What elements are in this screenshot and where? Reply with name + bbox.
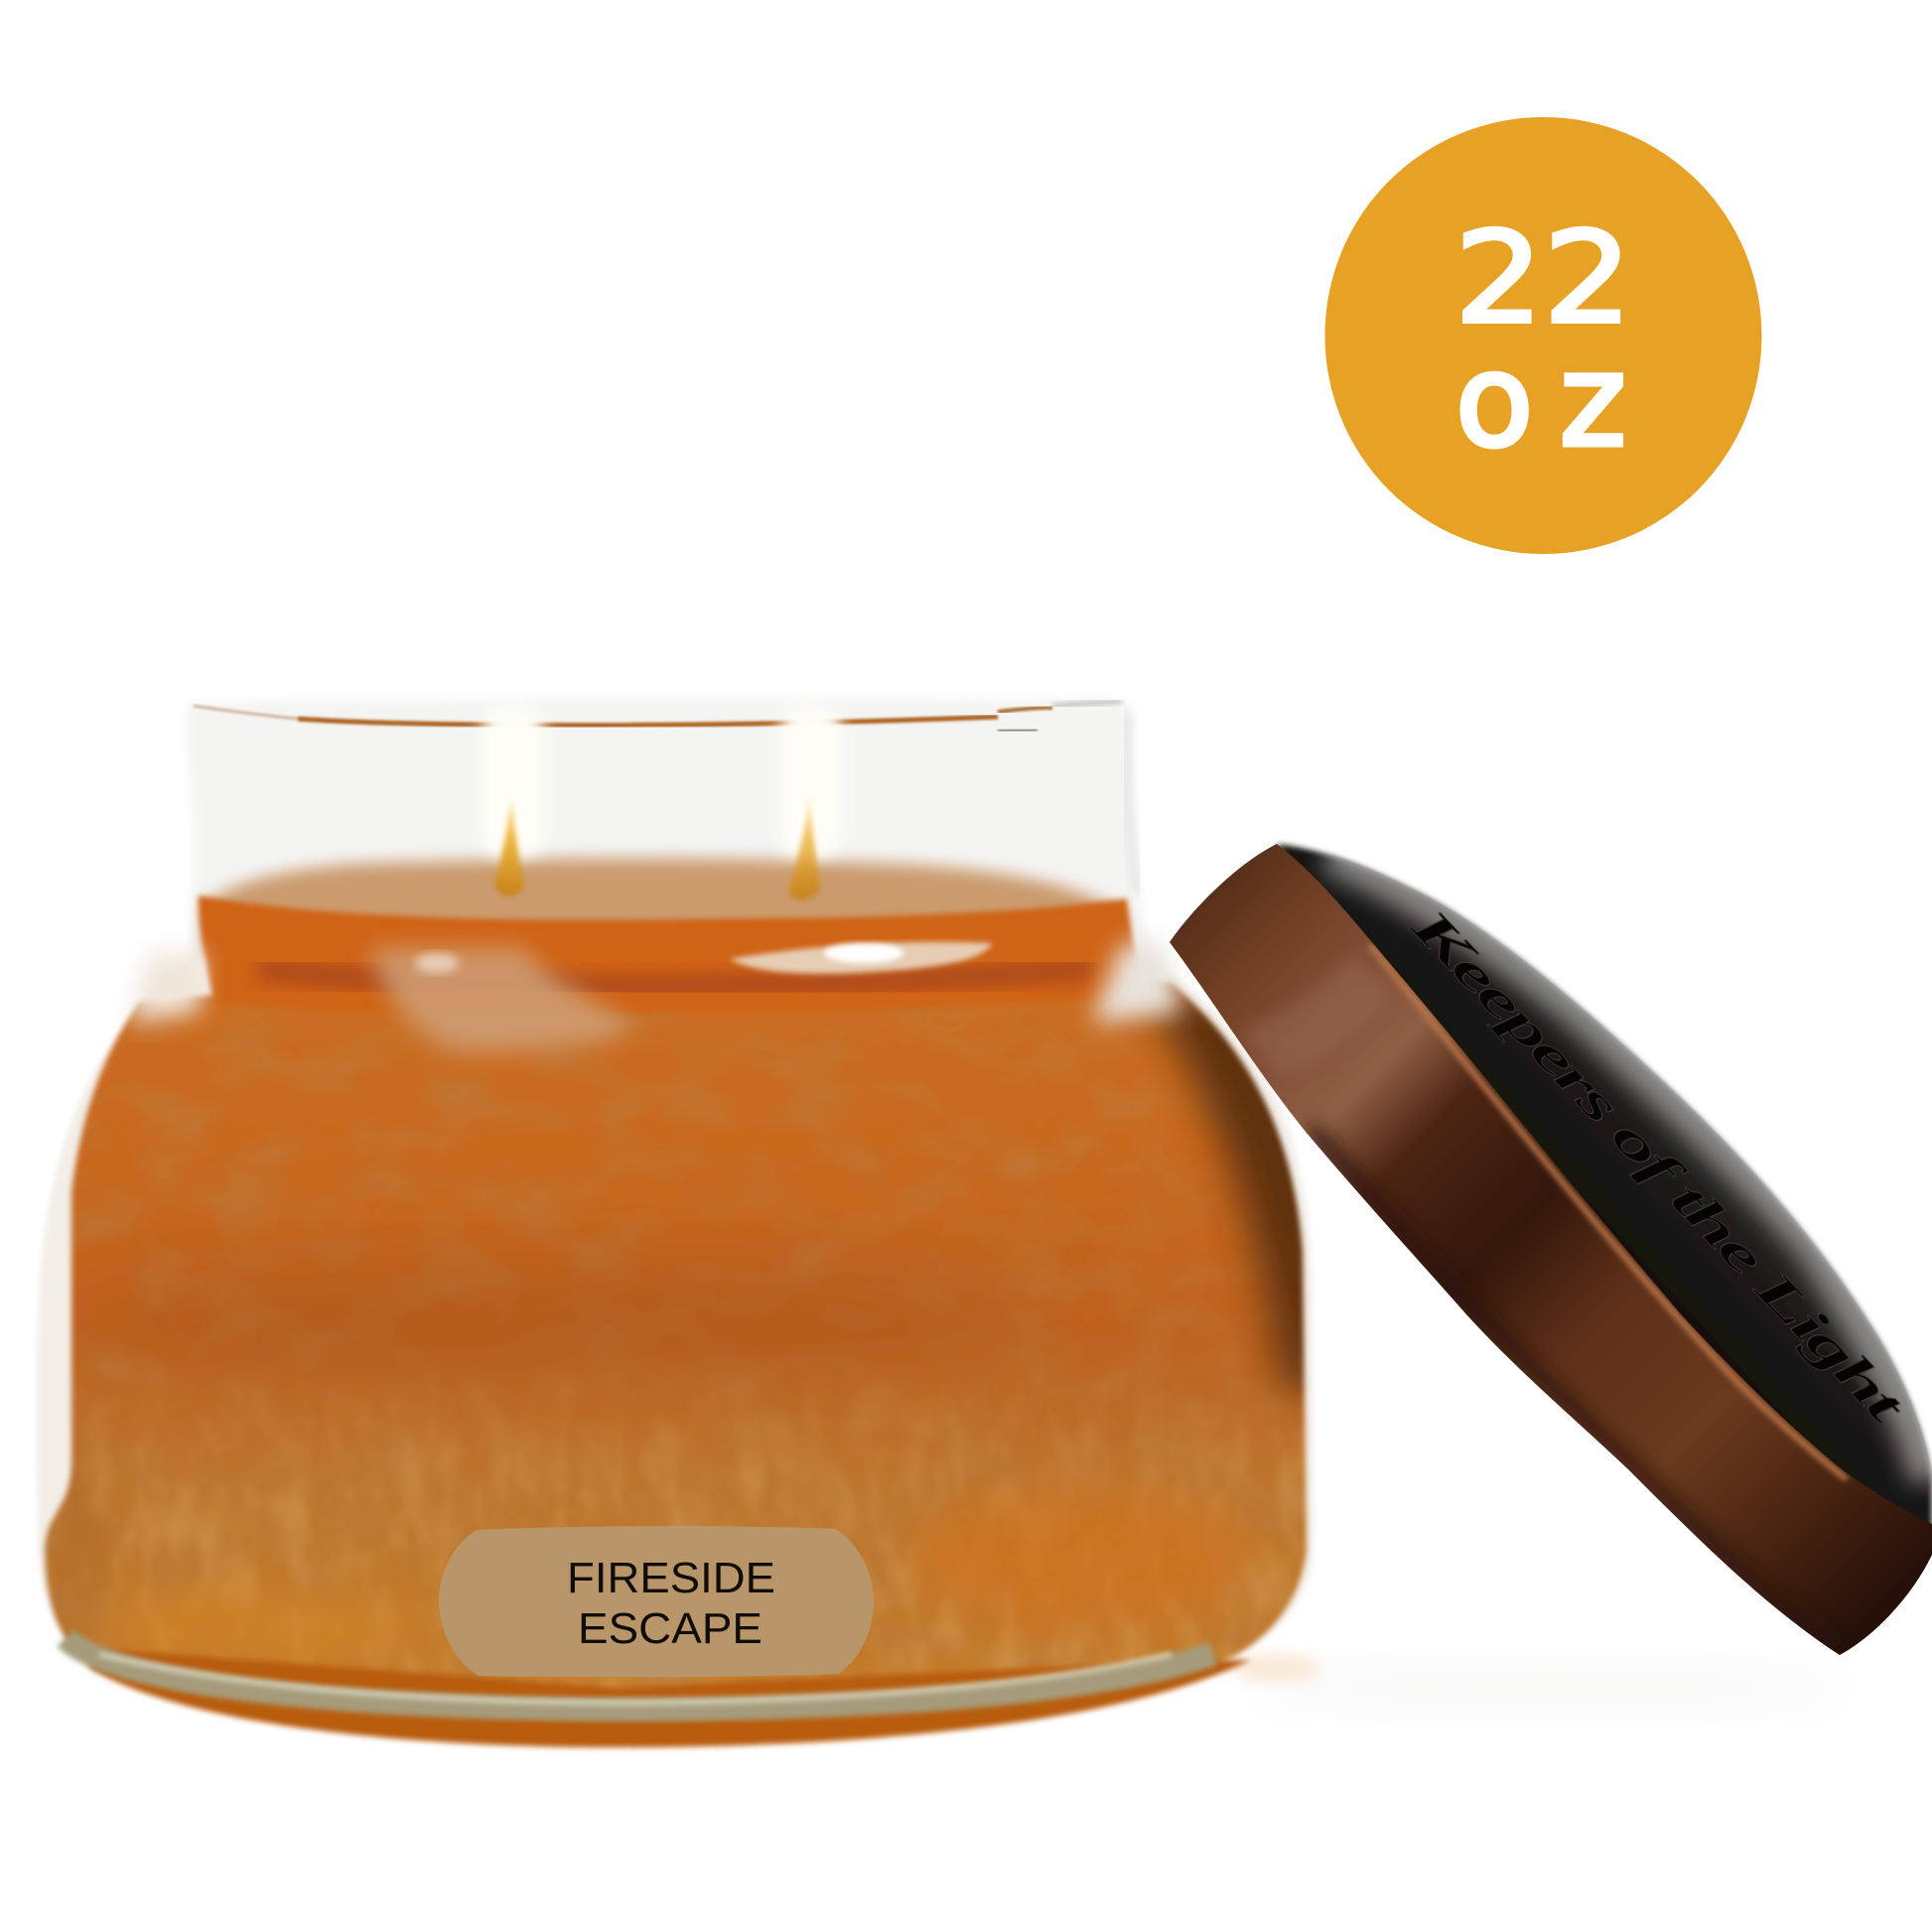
embossed lid lettering: Keepers of the Light [1401,897,1915,1436]
copper lid [1170,844,1932,1655]
wax shoulder band [199,896,1152,1014]
flame left [483,707,544,896]
rim highlight [1370,945,1847,1479]
rim sheen [1241,953,1390,1077]
lid cap top [1277,844,1932,1539]
badge number: 22 [1454,205,1632,351]
dark band in wax [207,1272,943,1368]
badge circle [1324,117,1761,554]
melted wax surface [204,858,1124,953]
wax lower light mottling [50,1370,1307,1689]
candle jar [30,697,1330,1747]
glass neck [187,697,1152,958]
cap outer light edge [1330,850,1932,1479]
floor shadow under jar and lid [1231,1654,1847,1710]
glass body [37,943,1313,1723]
base wax shadow [89,1648,1251,1747]
label shape [439,1526,874,1677]
size badge [1324,117,1761,554]
glass reflections [129,942,1181,1052]
rim details [1241,945,1847,1643]
lower right warm patch [913,1489,1251,1628]
wax mottling [71,1009,1307,1684]
left lower edge tone [47,1486,99,1634]
lower left warm patch [89,1593,427,1663]
glass rim orange line [194,701,1122,731]
flame right [780,707,842,899]
label text [567,1554,775,1653]
shoulder shadow [258,968,1092,987]
dark right edge [1142,993,1330,1390]
base glass rim [66,1638,1213,1710]
rim lower shadow [1311,1127,1837,1643]
badge unit: oz [1455,328,1626,476]
label text: FIRESIDE [567,1554,775,1602]
lid rim [1170,844,1932,1655]
base highlight [99,1654,1172,1703]
wax body [40,979,1311,1692]
scent label [439,1526,874,1677]
label text: ESCAPE [578,1604,762,1653]
